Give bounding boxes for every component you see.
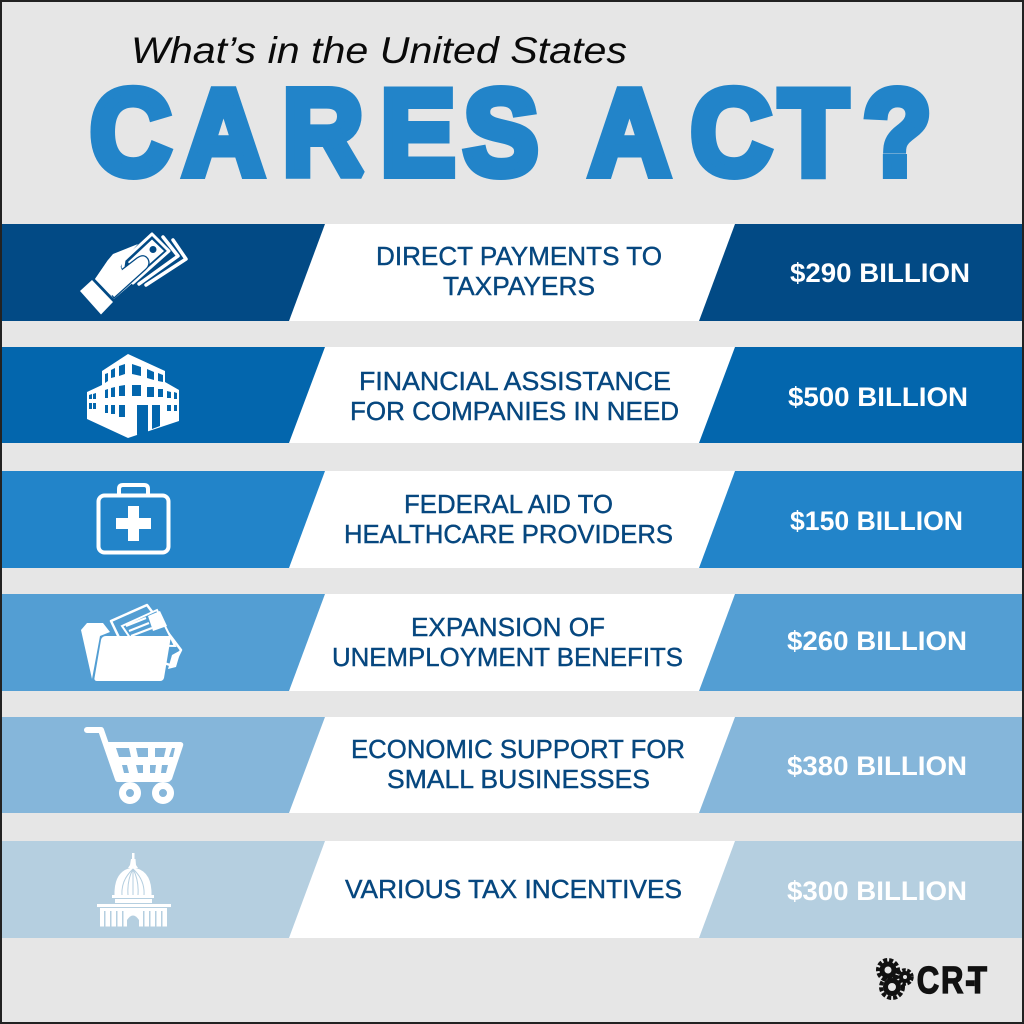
- row 4: unemployment: [2, 594, 1022, 691]
- icon: medical kit: [98, 485, 168, 552]
- row text: ECONOMIC SUPPORT FOR: [351, 736, 685, 764]
- row text line 2: HEALTHCARE PROVIDERS: [344, 521, 673, 549]
- amount: $290 BILLION: [790, 258, 970, 288]
- row text: FEDERAL AID TO: [404, 491, 613, 519]
- row text line 2: SMALL BUSINESSES: [387, 766, 650, 794]
- row text line 2: TAXPAYERS: [443, 273, 595, 301]
- icon: folder with papers: [81, 605, 181, 681]
- row text: VARIOUS TAX INCENTIVES: [345, 876, 682, 904]
- amount: $300 BILLION: [787, 876, 967, 906]
- row 3: federal aid: [2, 471, 1022, 568]
- row 5: small businesses: [2, 717, 1022, 813]
- icon: capitol dome: [97, 853, 171, 926]
- row 2: financial assistance: [2, 347, 1022, 443]
- title: CARES ACT?: [90, 64, 932, 201]
- icon: hand with money: [80, 234, 186, 314]
- amount: $260 BILLION: [787, 626, 967, 656]
- subtitle: What’s in the United States: [131, 30, 627, 71]
- amount: $500 BILLION: [788, 382, 968, 412]
- logo: CR-T: [878, 960, 987, 1002]
- amount: $380 BILLION: [787, 751, 967, 781]
- icon: shopping cart: [87, 730, 183, 800]
- icon: gears: [878, 960, 912, 998]
- icon: office building: [87, 354, 179, 438]
- row 6: tax incentives: [2, 841, 1022, 938]
- row text line 2: FOR COMPANIES IN NEED: [350, 398, 679, 426]
- logo text: CR-T: [917, 960, 987, 1002]
- amount: $150 BILLION: [790, 506, 963, 536]
- row text: EXPANSION OF: [411, 614, 605, 642]
- row text line 2: UNEMPLOYMENT BENEFITS: [332, 644, 683, 672]
- row text: DIRECT PAYMENTS TO: [376, 243, 662, 271]
- row text: FINANCIAL ASSISTANCE: [359, 368, 671, 396]
- row 1: direct payments: [2, 224, 1022, 321]
